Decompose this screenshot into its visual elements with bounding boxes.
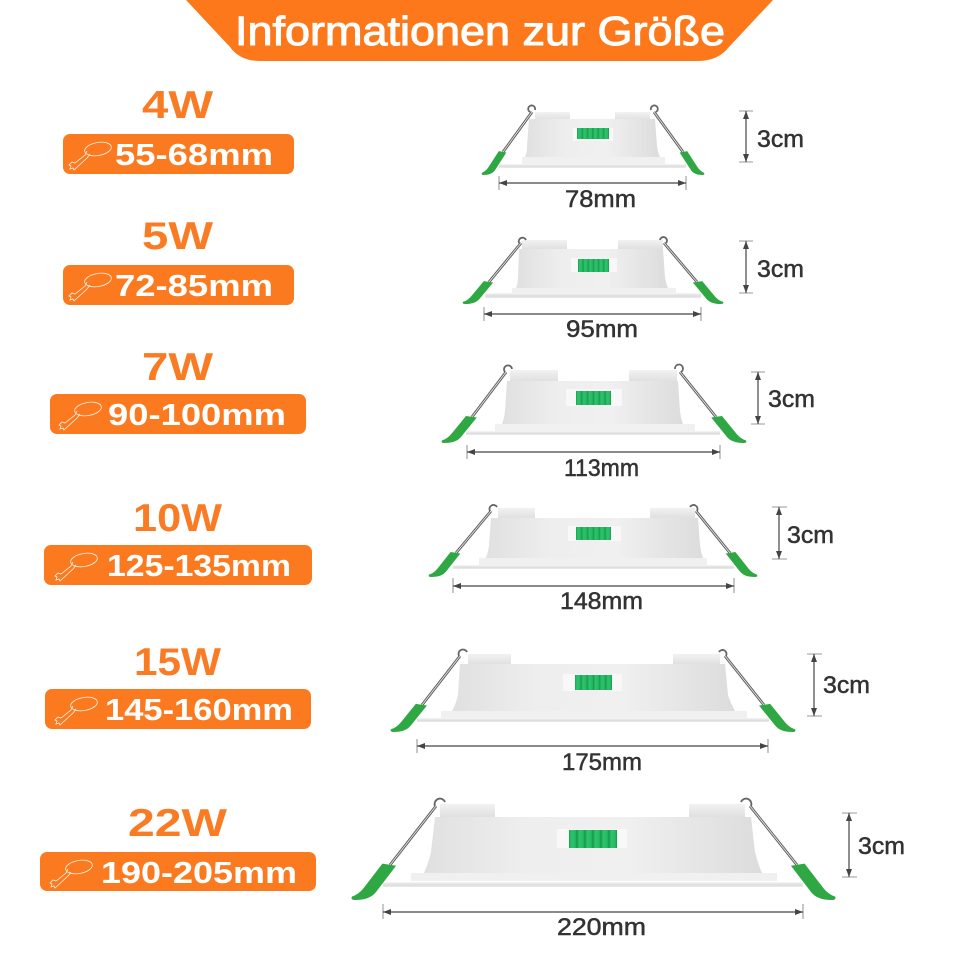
width dimension: 175mm	[417, 739, 768, 776]
height dimension: 3cm	[772, 507, 834, 559]
panel: 4W label: 55-68mm	[115, 137, 273, 172]
width dimension: 78mm: 78mm	[565, 186, 636, 213]
width dimension: 113mm	[467, 445, 720, 482]
height dimension: 3cm	[842, 813, 905, 877]
width dimension: 95mm	[484, 307, 701, 343]
height dimension: 3cm	[739, 241, 804, 293]
height dimension: 3cm	[739, 111, 804, 162]
panel: 15W label	[45, 641, 311, 729]
lamp diagram: 7W	[442, 365, 746, 443]
height dimension: 3cm: 3cm	[757, 126, 804, 153]
width dimension: 95mm: 95mm	[566, 316, 638, 343]
width dimension: 148mm: 148mm	[560, 588, 643, 615]
panel: 10W label	[44, 497, 312, 585]
width dimension: 175mm: 175mm	[562, 749, 642, 776]
panel: 22W label	[40, 802, 316, 891]
panel: 15W label: 145-160mm	[105, 692, 293, 727]
width dimension: 113mm: 113mm	[564, 455, 639, 482]
height dimension: 3cm	[751, 372, 815, 424]
panel: 7W label: 90-100mm	[108, 397, 286, 432]
panel: 10W label: 10W	[133, 497, 222, 540]
panel: 22W label: 22W	[128, 802, 227, 845]
height dimension: 3cm: 3cm	[757, 256, 804, 283]
lamp diagram: 22W	[351, 799, 836, 900]
lamp diagram: 4W	[482, 105, 704, 175]
width dimension: 220mm	[383, 904, 803, 941]
height dimension: 3cm: 3cm	[823, 672, 870, 699]
panel: 22W label: 190-205mm	[101, 855, 297, 890]
height dimension: 3cm: 3cm	[787, 522, 834, 549]
lamp diagram: 10W	[429, 505, 757, 577]
panel: 4W label	[63, 84, 294, 174]
width dimension: 148mm	[453, 578, 734, 615]
panel: 7W label	[50, 346, 306, 434]
title banner: Informationen zur Größe	[235, 8, 725, 54]
width dimension: 78mm	[499, 176, 686, 213]
height dimension: 3cm: 3cm	[858, 833, 905, 860]
title banner	[186, 0, 773, 61]
panel: 15W label: 15W	[134, 641, 221, 684]
height dimension: 3cm	[807, 654, 870, 716]
height dimension: 3cm: 3cm	[768, 386, 815, 413]
width dimension: 220mm: 220mm	[557, 914, 646, 941]
panel: 5W label: 72-85mm	[115, 268, 273, 303]
panel: 10W label: 125-135mm	[107, 548, 291, 583]
panel: 4W label: 4W	[142, 84, 213, 127]
panel: 5W label: 5W	[142, 215, 213, 258]
lamp diagram: 15W	[391, 650, 795, 732]
lamp diagram: 5W	[463, 237, 723, 304]
panel: 5W label	[63, 215, 294, 305]
panel: 7W label: 7W	[142, 346, 213, 389]
